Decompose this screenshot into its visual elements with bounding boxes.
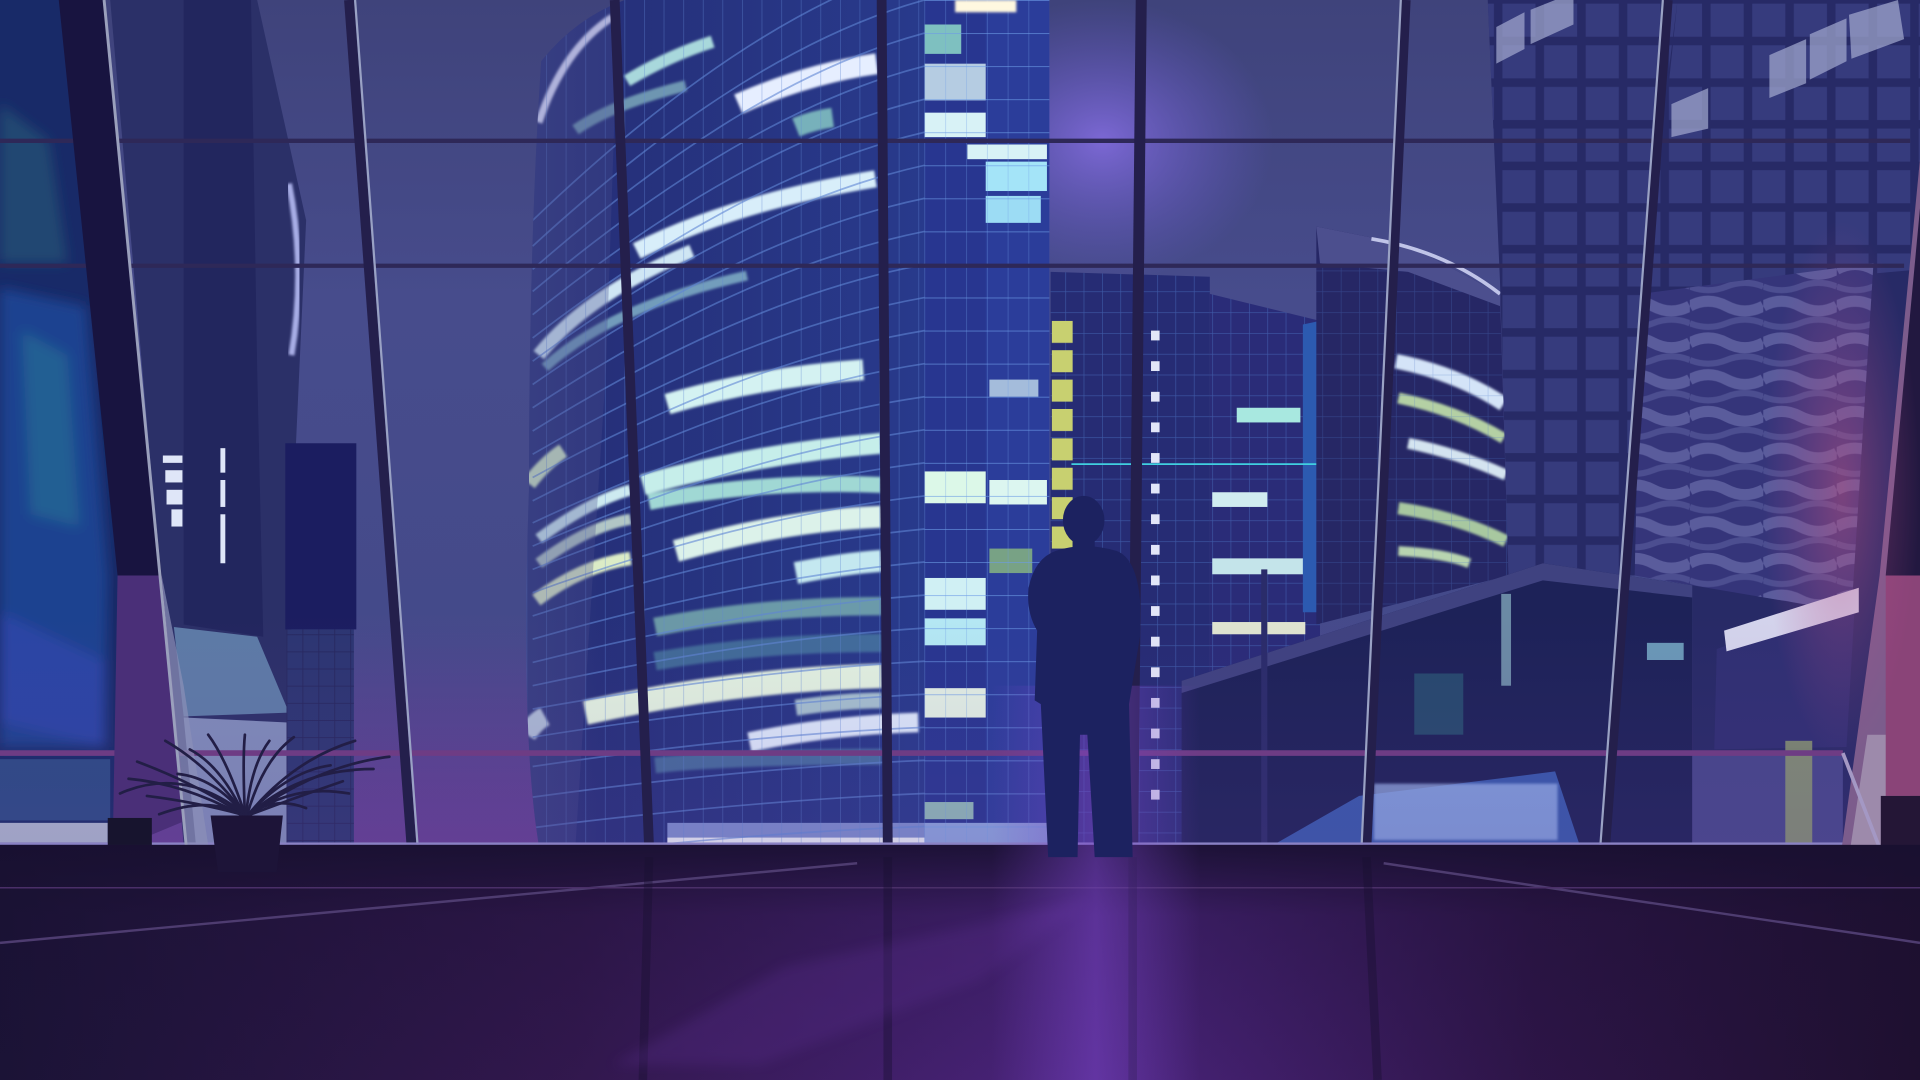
lens flare beam: [992, 686, 1200, 1080]
person silhouette: [1028, 496, 1140, 857]
corner tower face: [924, 0, 1049, 845]
warm glow right edge: [1763, 220, 1920, 759]
left reflected building: [110, 0, 306, 845]
right pillar: [1840, 159, 1920, 863]
mid distance towers: [1051, 272, 1341, 845]
potted plant: [120, 735, 389, 872]
evening haze: [0, 612, 1920, 845]
large right building: [1488, 0, 1920, 845]
soft purple wash over buildings: [0, 612, 1920, 845]
sky: [0, 0, 1920, 857]
window frame: [0, 0, 1920, 845]
floor: [0, 845, 1920, 1080]
left reflective wall: [0, 0, 122, 845]
curved central tower: [520, 0, 931, 858]
curved tower on the right of centre: [1316, 227, 1509, 624]
tower base: [667, 823, 924, 838]
distant dark sign tower: [285, 443, 356, 845]
tower floor lines: [533, 0, 924, 858]
reflected sign marks: [163, 448, 225, 563]
reflected lit panels: [1496, 0, 1904, 137]
haze on tower left edge: [527, 0, 618, 845]
left pillar: [59, 0, 208, 855]
glass pavilion: [1182, 563, 1692, 845]
lit office floors: [527, 17, 918, 765]
far right lower wall: [1692, 741, 1843, 845]
sky glow: [931, 0, 1273, 282]
